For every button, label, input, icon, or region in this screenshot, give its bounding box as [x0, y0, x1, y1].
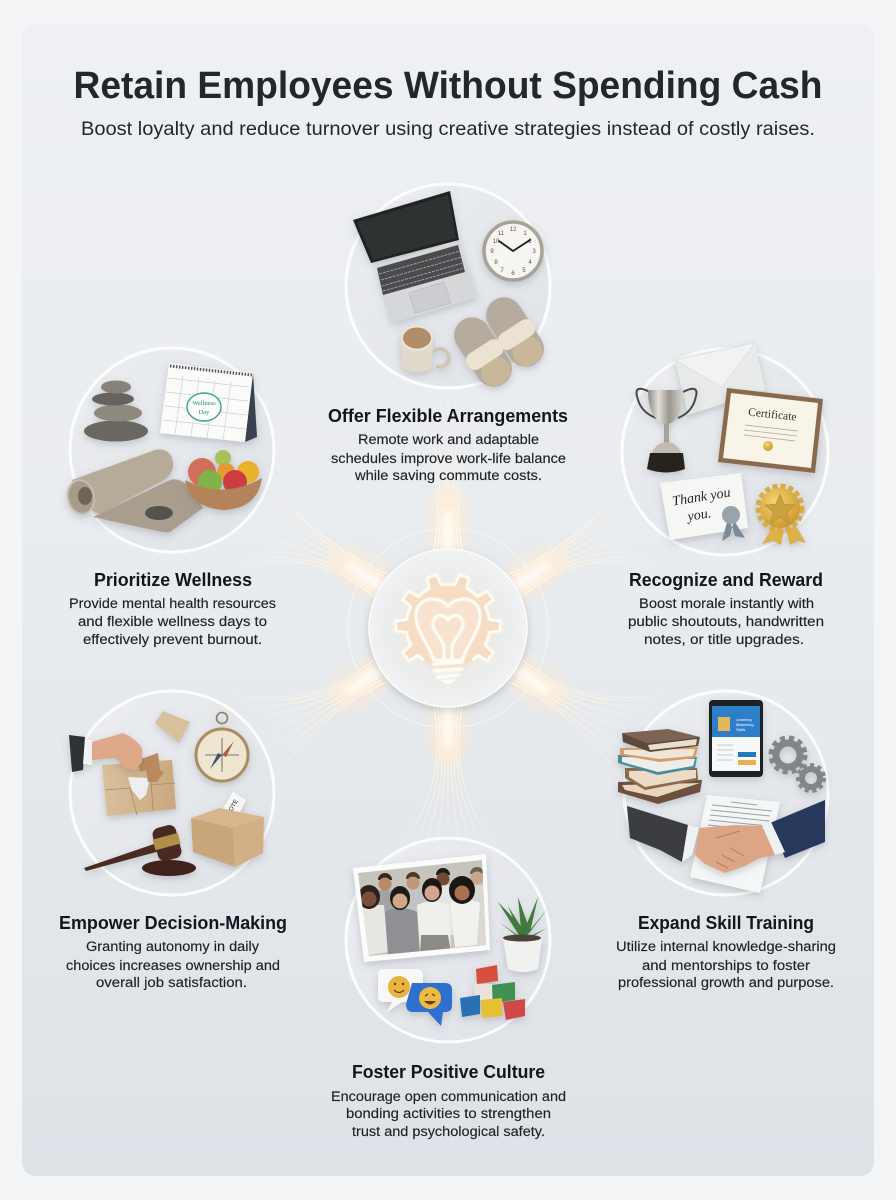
icon: ballot box [191, 792, 264, 867]
heading: Recognize and Reward [629, 569, 823, 590]
icon: envelope [675, 343, 765, 415]
icon: wall clock: 1 [523, 231, 527, 237]
icon: gold medal [758, 486, 806, 545]
description: effectively prevent burnout. [83, 632, 262, 648]
icon: thank-you card: you. [685, 506, 712, 525]
icon: wall clock: 6 [511, 271, 515, 277]
icon: tablet: Skills [736, 727, 745, 732]
icon: toy blocks [460, 965, 525, 1020]
description [628, 596, 824, 648]
icon: wall clock: 4 [528, 260, 532, 266]
icon: tablet [709, 700, 763, 777]
icon: wall clock: 7 [500, 268, 504, 274]
icon: document [690, 795, 780, 893]
icon: handshake [627, 800, 825, 873]
image circle: envelope, trophy, certificate and medal [622, 343, 828, 555]
panel: decision making [59, 691, 287, 991]
icon: chat bubbles [378, 969, 452, 1026]
icon: yoga mat [65, 450, 203, 532]
heading: Expand Skill Training [638, 912, 814, 933]
image circle: stones, calendar, yoga mat and fruit [65, 348, 274, 552]
icon: tablet: Learning [736, 717, 752, 722]
central hub: lightbulb, heart and gear [348, 528, 548, 728]
heading: Empower Decision-Making [59, 912, 287, 933]
icon: desk calendar: Wellness [192, 400, 216, 407]
description [66, 939, 280, 991]
icon: desk calendar [160, 363, 257, 442]
description: choices increases ownership and [66, 958, 280, 974]
description: Encourage open communication and [331, 1089, 566, 1105]
icon: wall clock: 12 [510, 227, 517, 233]
panel: positive culture [331, 838, 566, 1140]
icon: puzzle [102, 711, 190, 816]
icon: thank-you card [660, 473, 748, 541]
icon: tablet: Mastering [736, 722, 754, 727]
icon: slippers [446, 289, 552, 395]
icon: wall clock: 2 [528, 239, 532, 245]
heading: Foster Positive Culture [352, 1061, 545, 1082]
icon: team photo [350, 854, 490, 962]
icon: wall clock: 11 [498, 231, 505, 237]
description: while saving commute costs. [354, 468, 542, 484]
description: Provide mental health resources [69, 596, 276, 612]
subtitle: Boost loyalty and reduce turnover using creative strategies instead of costly raises. [81, 118, 815, 140]
icon: wall clock: 10 [493, 239, 500, 245]
description: public shoutouts, handwritten [628, 614, 824, 630]
description: and flexible wellness days to [78, 614, 267, 630]
icon: hand with cuff [69, 733, 142, 772]
icon: trophy [637, 389, 696, 472]
light rays from hub [232, 385, 664, 845]
icon: desk calendar: Day [199, 409, 210, 416]
description: Utilize internal knowledge-sharing [616, 939, 836, 955]
icon: thank-you card: Thank you [671, 486, 732, 510]
heading: Prioritize Wellness [94, 569, 252, 590]
description [331, 1089, 566, 1140]
panel: flexible arrangements [328, 184, 568, 484]
icon: wall clock: 3 [532, 249, 536, 255]
icon: laptop [353, 191, 478, 323]
icon: gears [771, 738, 824, 791]
icon: certificate [718, 388, 823, 473]
icon: certificate: Certificate [748, 407, 797, 424]
panel: skill training [616, 691, 836, 991]
description: professional growth and purpose. [618, 975, 834, 991]
description: schedules improve work-life balance [331, 451, 566, 467]
description: Remote work and adaptable [358, 432, 539, 448]
description: Boost morale instantly with [639, 596, 814, 612]
panel: wellness [65, 348, 276, 648]
icon: wall clock [484, 222, 542, 280]
image circle: team photo, plant, chat bubbles and blocks [346, 838, 550, 1042]
heading: Offer Flexible Arrangements [328, 405, 568, 426]
icon: wall clock: 8 [494, 260, 498, 266]
image circle: puzzle, compass, ballot box and gavel [69, 691, 274, 895]
icon: fruit bowl [185, 450, 262, 510]
icon: wall clock: 5 [522, 268, 526, 274]
panel: recognition [622, 343, 828, 648]
description: overall job satisfaction. [96, 975, 247, 991]
description: notes, or title upgrades. [644, 632, 804, 648]
icon: gear and bulb [396, 573, 500, 684]
description: Granting autonomy in daily [86, 939, 260, 955]
icon: stacked books [618, 729, 702, 804]
description [616, 939, 836, 991]
image circle: laptop, clock, mug and slippers [346, 184, 552, 395]
icon: wall clock: 9 [490, 249, 494, 255]
icon: compass [196, 712, 248, 781]
image circle: books, tablet, gears and handshake [618, 691, 828, 895]
icon: potted plant [498, 897, 548, 972]
description [331, 432, 566, 484]
icon: stacked stones [84, 380, 148, 442]
title: Retain Employees Without Spending Cash [74, 65, 822, 107]
description: and mentorships to foster [642, 958, 810, 974]
description [69, 596, 276, 648]
description: bonding activities to strengthen [346, 1106, 551, 1122]
icon: gavel [84, 823, 196, 876]
icon: coffee mug [400, 325, 449, 372]
description: trust and psychological safety. [352, 1124, 545, 1140]
icon: ballot box: VOTE [226, 799, 240, 816]
